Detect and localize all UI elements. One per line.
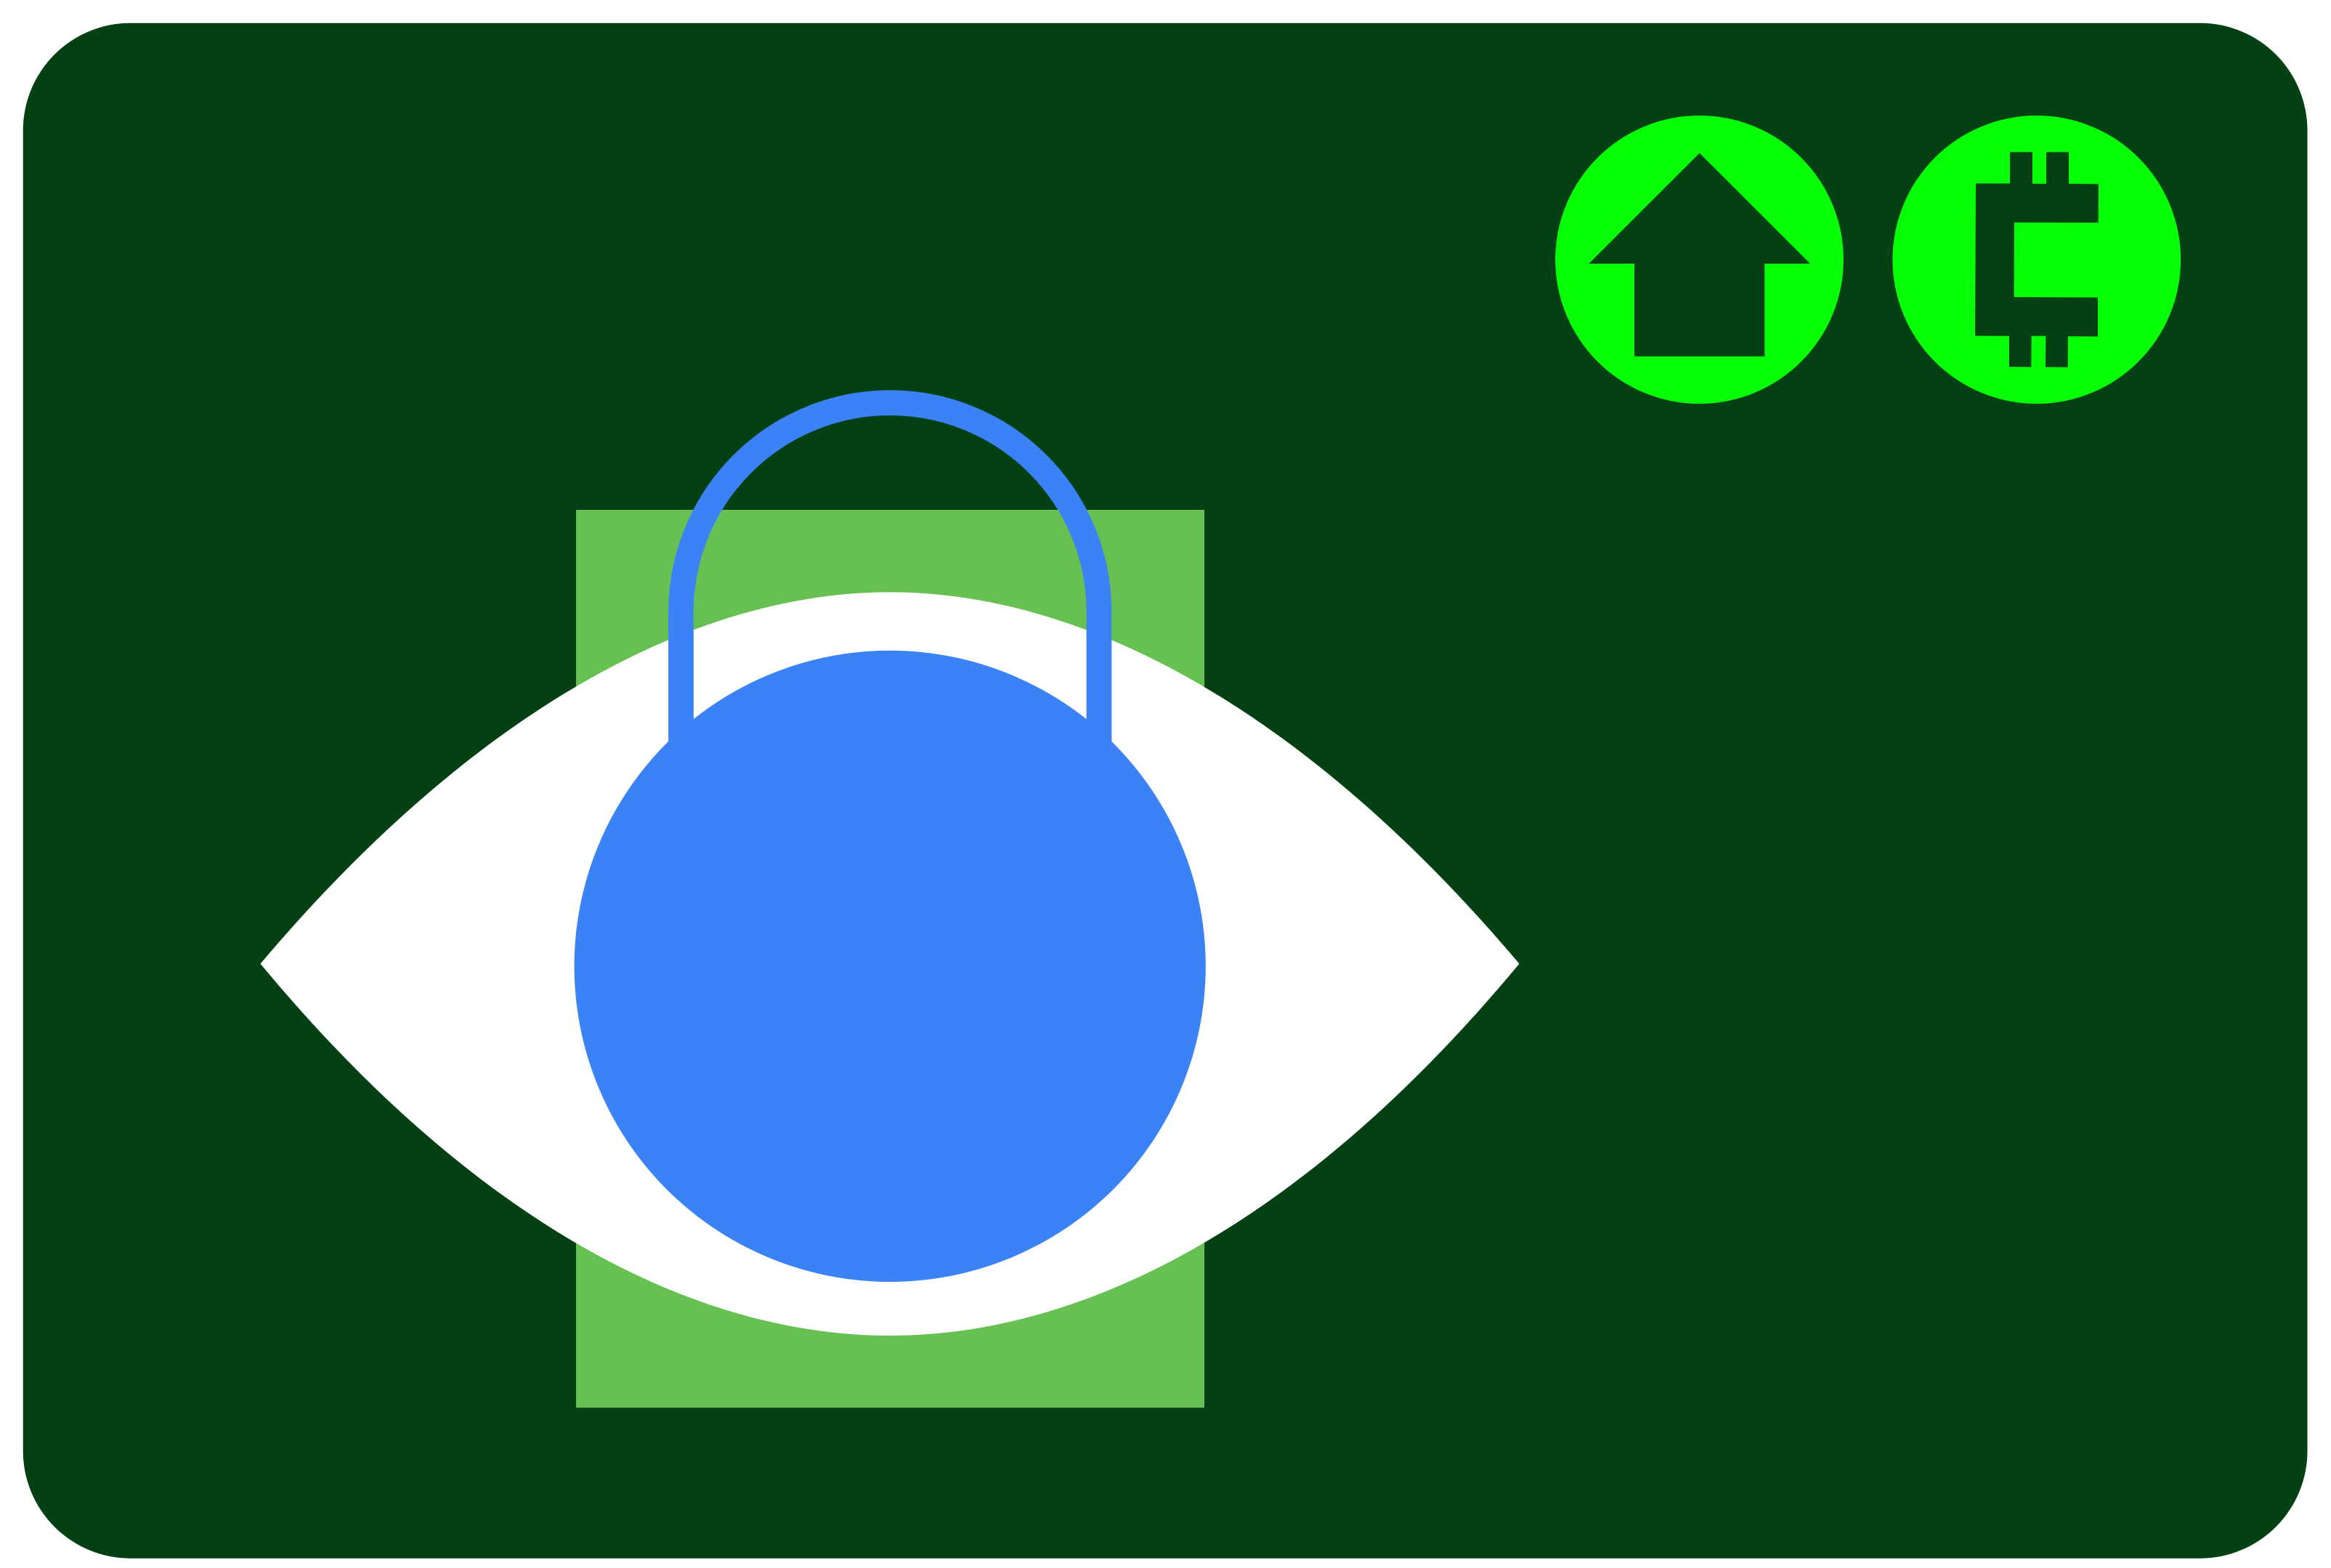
icon: home badge <box>1555 115 1844 404</box>
coin glyph <box>1975 152 2099 367</box>
icon: white eye shape <box>260 592 1520 1336</box>
icon: blue padlock <box>575 403 1206 1282</box>
home badge circle <box>1555 115 1844 404</box>
padlock body circle <box>575 651 1206 1282</box>
home glyph <box>1589 153 1810 357</box>
icon: bitcoin coin badge <box>1892 115 2181 404</box>
light green rectangle behind eye <box>576 510 1204 1407</box>
padlock shackle <box>681 403 1099 770</box>
coin badge circle <box>1892 115 2181 404</box>
